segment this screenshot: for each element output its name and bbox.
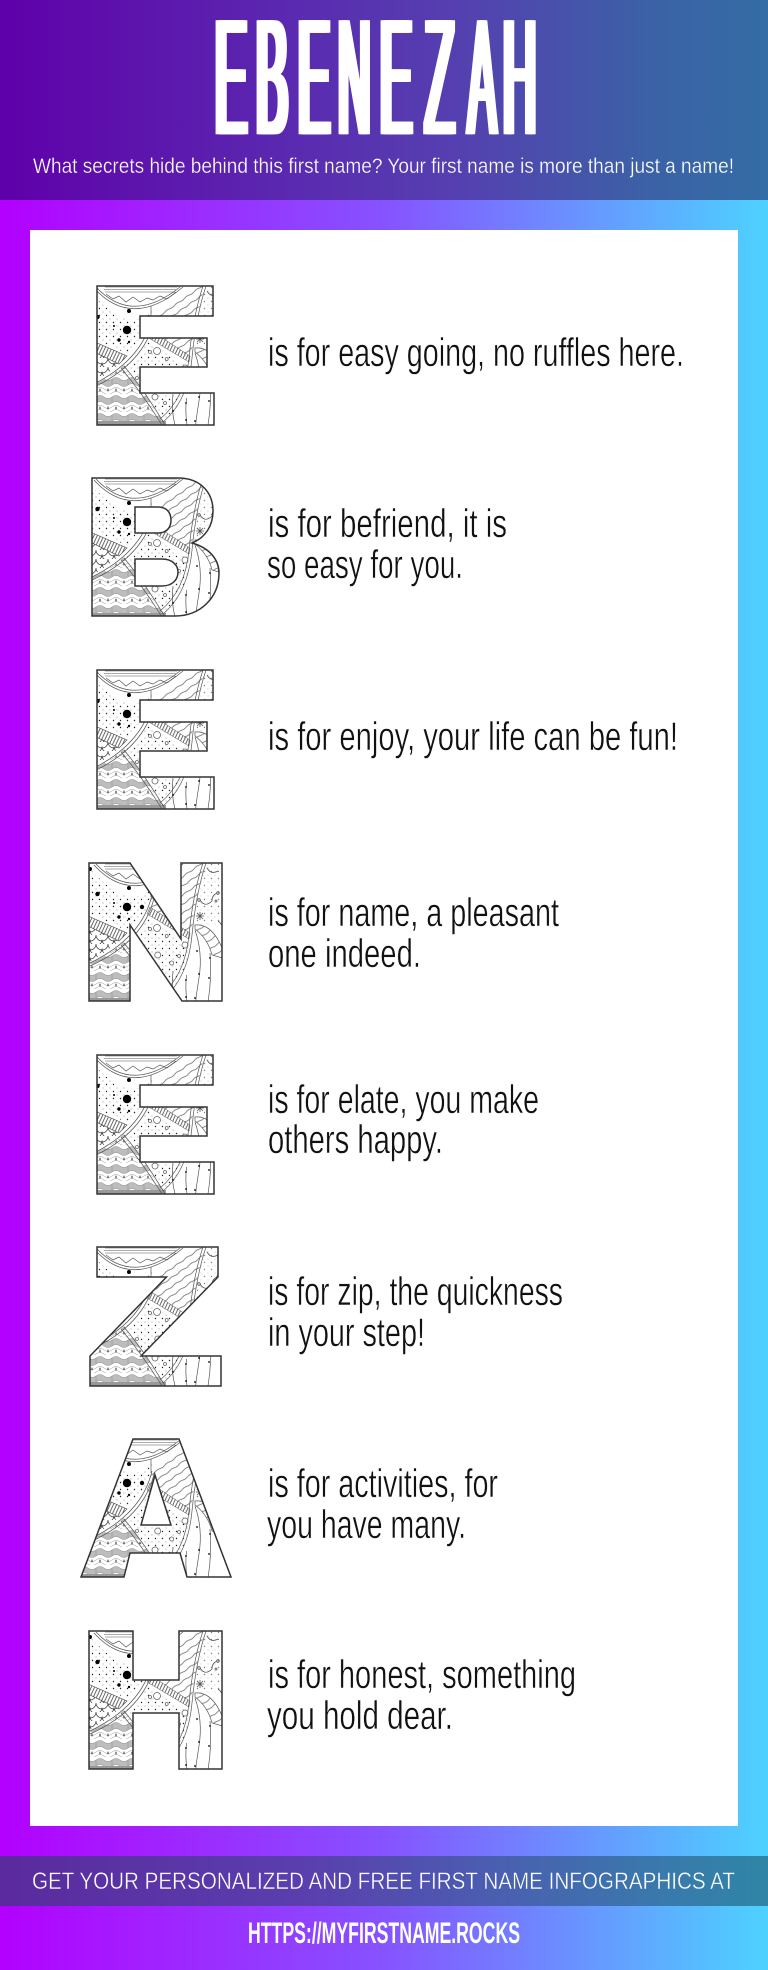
text: E lines: others happy. [268,1118,443,1162]
row 3: letter E [97,670,678,809]
icon: patterned letter A [81,1439,231,1577]
text: Z lines [268,1270,563,1355]
footer url: HTTPS://MYFIRSTNAME.ROCKS [248,1917,520,1950]
row 4: letter N [89,863,559,1001]
text: A lines: you have many. [267,1503,466,1547]
text: A lines [267,1462,498,1547]
icon: patterned letter N [89,863,222,1001]
text: N lines [268,891,559,976]
text: H lines [267,1653,576,1738]
header band [0,0,768,200]
icon: patterned letter E [97,1055,214,1194]
text: Z lines: is for zip, the quickness [268,1270,563,1314]
row 7: letter A [81,1439,498,1577]
text: N lines: one indeed. [268,932,421,976]
text: B lines [267,502,507,587]
text: N lines: is for name, a pleasant [268,891,559,935]
icon: patterned letter H [89,1631,222,1769]
text: B lines: so easy for you. [267,543,463,587]
text: Z lines: in your step! [268,1311,425,1355]
text: A lines: is for activities, for [268,1462,498,1506]
icon: patterned letter E [97,286,214,425]
icon: patterned letter Z [90,1247,221,1386]
row 8: letter H [89,1631,576,1769]
white panel [30,230,738,1826]
text: E lines: is for elate, you make [268,1078,539,1122]
text: H lines: you hold dear. [267,1694,453,1738]
icon: patterned letter B [92,478,219,616]
text: B lines: is for befriend, it is [268,502,507,546]
footer band [0,1856,768,1906]
row 6: letter Z [90,1247,563,1386]
row 5: letter E [97,1055,539,1194]
text: H lines: is for honest, something [268,1653,576,1697]
icon: patterned letter E [97,670,214,809]
row 1: letter E [97,286,684,425]
text: E lines [268,1078,539,1162]
title [214,0,536,170]
row 2: letter B [92,478,507,616]
